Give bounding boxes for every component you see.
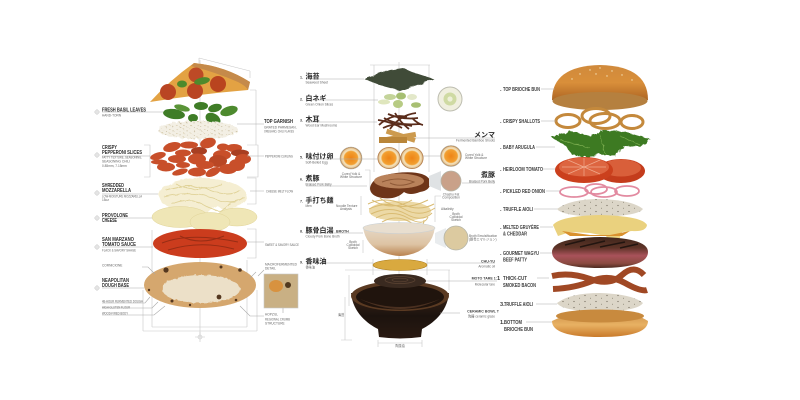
icon: bottom brioche bun bbox=[552, 310, 648, 337]
label: crispy shallots: . bbox=[500, 119, 502, 125]
label: dough specs: WOOD-FIRED BODY bbox=[102, 312, 129, 316]
label: crispy shallots: CRISPY SHALLOTS bbox=[503, 119, 540, 125]
label: 6 chashu: 煮豚 bbox=[306, 174, 320, 182]
label: cheese melt flow: CHEESE MELT FLOW bbox=[266, 190, 293, 194]
label: egg closeup captions: Cured Yolk & bbox=[465, 153, 484, 157]
label: broth collodial: Sketch bbox=[451, 218, 461, 222]
label: moto tare: Molecular tare bbox=[475, 282, 495, 286]
leader lines for burger bbox=[526, 89, 560, 322]
label: moto tare bbox=[472, 276, 497, 286]
label: chashu composition: Chashu Fat bbox=[443, 192, 459, 196]
label: dough specs bbox=[102, 300, 144, 316]
label: top brioche bun: TOP BRIOCHE BUN bbox=[503, 87, 540, 93]
label: macrofermented detail: DETAIL bbox=[265, 266, 276, 270]
icon: smoked bacon bbox=[552, 270, 647, 290]
icon: broth closeup bbox=[435, 226, 468, 250]
label: bottom brioche bun: 1. bbox=[500, 320, 505, 326]
icon: menma bamboo shoots bbox=[379, 129, 416, 143]
icon: basil leaves bbox=[162, 102, 239, 128]
label: thick-cut smoked bacon bbox=[497, 276, 536, 289]
label: 9 aroma oil bbox=[300, 256, 326, 270]
dimension lines for ramen bbox=[341, 62, 450, 347]
label: 8 tonkotsu broth: 8. bbox=[300, 230, 303, 234]
label: chashu right bbox=[469, 170, 495, 184]
label: 2 green onion: 2. bbox=[300, 98, 303, 102]
icon: baby arugula bbox=[551, 130, 650, 157]
icon: noodles bbox=[368, 198, 435, 226]
label: gourmet wagyu beef patty bbox=[500, 251, 539, 264]
label: 8 tonkotsu broth: Cloudy Pork Bone Broth bbox=[306, 234, 340, 238]
label: top garnish: OREGANO, CHILI FLAKES bbox=[264, 130, 294, 134]
label: shredded mozzarella: SHREDDED bbox=[102, 183, 124, 189]
icon: marinated egg halves bbox=[378, 147, 424, 169]
label: truffle aioli: . bbox=[500, 207, 502, 213]
label: 8 tonkotsu broth: 豚骨白湯 bbox=[306, 226, 334, 234]
label: egg closeup captions: Cured Yolk & bbox=[342, 172, 361, 176]
label: bowl foot: 陶藻油 bbox=[395, 343, 405, 348]
label: 4 menma: メンマ bbox=[474, 131, 495, 139]
panel: ramen diagram bbox=[300, 62, 500, 348]
label: provolone cheese: PROVOLONE bbox=[102, 213, 128, 219]
label: truffle aioli lower: TRUFFLE AIOLI bbox=[504, 302, 533, 308]
label: noodle texture analysis: Noodle Texture bbox=[336, 204, 358, 208]
inset: crust crumb detail bbox=[264, 274, 298, 308]
icon: chashu closeup bbox=[429, 171, 461, 191]
label: moto tare: MOTO TARE 1: bbox=[472, 276, 497, 280]
label: provolone cheese bbox=[102, 213, 128, 224]
icon: truffle aioli bottom bbox=[557, 293, 643, 312]
label: san marzano tomato sauce: TOMATO SAUCE bbox=[102, 242, 136, 248]
label: crispy pepperoni slices: PEPPERONI SLICES bbox=[102, 150, 142, 156]
label: broth colloidal left: Collioidal bbox=[347, 243, 360, 247]
label: chashu composition bbox=[442, 192, 460, 200]
leader lines for ramen bbox=[306, 79, 497, 313]
label: 4 menma bbox=[456, 131, 495, 142]
icon: tomato sauce bbox=[153, 229, 247, 258]
icon: provolone discs bbox=[152, 206, 257, 232]
label: crispy pepperoni slices: CRISPY bbox=[102, 145, 117, 151]
label: 4 menma: Fermented Bamboo Shoots bbox=[456, 138, 495, 142]
label: chu-yu bbox=[478, 260, 495, 268]
label: ceramic bowl: 陶器 ceramic glaze bbox=[468, 314, 495, 318]
dimension lines for pizza bbox=[143, 58, 258, 342]
label: melted gruyere and cheddar: . bbox=[500, 225, 502, 231]
icon: ceramic ramen bowl bbox=[351, 274, 449, 338]
label: top garnish: GRATED PARMESAN, bbox=[264, 126, 297, 130]
icon: nori sheet bbox=[364, 68, 434, 91]
label: 9 aroma oil: 9. bbox=[300, 260, 303, 264]
label: 6 chashu bbox=[300, 174, 332, 186]
label: 1 nori: Seaweed Sheet bbox=[306, 80, 328, 84]
label: macrofermented detail: MACROFERMENTED bbox=[265, 262, 298, 266]
label: top brioche bun: . bbox=[500, 87, 502, 93]
icon: top brioche bun bbox=[552, 65, 648, 110]
label: bowl height: 海苔 bbox=[338, 312, 345, 317]
label: broth emulsification bbox=[469, 234, 497, 242]
label: chu-yu: CHU-YU bbox=[481, 260, 495, 264]
label: melted gruyere and cheddar: MELTED GRUYÈRE bbox=[503, 223, 539, 231]
label: melted gruyere and cheddar: & CHEDDAR bbox=[503, 232, 527, 238]
label: broth colloidal left bbox=[347, 240, 360, 250]
icon: wagyu beef patty bbox=[552, 237, 648, 268]
label: noodle texture analysis bbox=[336, 204, 358, 211]
label: 3 wood ear: Wood Ear Mushrooms bbox=[306, 124, 338, 128]
icon: wood ear mushrooms bbox=[378, 113, 423, 129]
label: truffle aioli: TRUFFLE AIOLI bbox=[503, 207, 533, 213]
label: thick-cut smoked bacon: SMOKED BACON bbox=[503, 283, 536, 289]
label: 7 noodles bbox=[300, 196, 334, 208]
label: crispy pepperoni slices bbox=[102, 145, 142, 168]
label: gourmet wagyu beef patty: GOURMET WAGYU bbox=[503, 251, 539, 257]
label: baby arugula: . bbox=[500, 145, 502, 151]
label: 6 chashu: Braised Pork Belly bbox=[306, 182, 332, 186]
label: thick-cut smoked bacon: 1 bbox=[497, 276, 500, 282]
label: 5 egg: 5. bbox=[300, 156, 303, 160]
label: 3 wood ear: 木耳 bbox=[306, 114, 320, 124]
icon: heirloom tomato bbox=[555, 157, 645, 183]
label: melted gruyere and cheddar bbox=[500, 223, 539, 238]
icon: pepperoni slices bbox=[149, 136, 251, 179]
label: top garnish: TOP GARNISH bbox=[264, 119, 293, 125]
label: 5 egg: 味付け卵 bbox=[306, 152, 334, 160]
label: ceramic bowl bbox=[467, 310, 500, 318]
icon: chashu pork belly bbox=[370, 172, 430, 198]
label: broth emulsification: (豚骨エマルジョン) bbox=[469, 236, 497, 242]
label: 8 tonkotsu broth bbox=[300, 226, 349, 238]
label: 1 nori: 1. bbox=[300, 76, 303, 80]
label: crispy pepperoni slices: 0.85mm, 7.15mm bbox=[102, 164, 127, 168]
label: 2 green onion: Green Onion Slices bbox=[306, 102, 334, 106]
label: chashu right: Braised Pork Belly bbox=[469, 180, 495, 184]
icon: melted cheese bbox=[553, 215, 647, 245]
label: top garnish bbox=[264, 119, 297, 134]
label: neapolitan dough base: DOUGH BASE bbox=[102, 283, 129, 289]
label: crispy pepperoni slices: SEASONING CHILI bbox=[102, 160, 130, 164]
label: shredded mozzarella bbox=[102, 183, 143, 202]
label: fresh basil leaves bbox=[102, 108, 146, 118]
label: san marzano tomato sauce: SAN MARZANO bbox=[102, 237, 134, 243]
icon: crispy shallots bbox=[556, 108, 643, 128]
label: 5 egg bbox=[300, 152, 334, 164]
icon: egg closeup left bbox=[340, 147, 362, 169]
label: fresh basil leaves: HAND-TORN bbox=[102, 114, 122, 118]
label: 1 nori bbox=[300, 72, 328, 84]
label: 6 chashu: 6. bbox=[300, 178, 303, 182]
label: 9 aroma oil: 香味油 bbox=[306, 256, 326, 266]
label: neapolitan dough base: NEAPOLITAN bbox=[102, 278, 129, 284]
label: shredded mozzarella: MOZZARELLA bbox=[102, 188, 131, 194]
label: egg closeup captions: White Structure bbox=[465, 156, 487, 160]
label: pepperoni curling: PEPPERONI CURLING bbox=[265, 154, 293, 158]
label: macrofermented detail bbox=[265, 262, 298, 270]
label: ceramic bowl: CERAMIC BOWL T bbox=[467, 310, 500, 314]
label: regional crumb structure: HOPZIU, bbox=[265, 312, 278, 316]
icon: tonkotsu broth bowl bbox=[363, 222, 435, 256]
label: broth collodial bbox=[450, 212, 463, 222]
icon: truffle aioli top bbox=[557, 199, 643, 217]
icon: parmesan garnish bbox=[158, 121, 238, 139]
label: 3 wood ear: 3. bbox=[300, 118, 303, 122]
label: regional crumb structure: STRUCTURE bbox=[265, 322, 285, 326]
label: bottom brioche bun bbox=[500, 320, 533, 333]
label: bottom brioche bun: BOTTOM bbox=[504, 320, 522, 326]
label: egg closeup captions: White Structure bbox=[340, 175, 362, 179]
label: egg closeup captions bbox=[340, 153, 487, 179]
label: sweet and savory sauce: SWEET & SAVORY SAUCE bbox=[265, 243, 299, 247]
panel: burger diagram bbox=[497, 65, 650, 337]
label: dough specs: HIGH-GLUTEN FLOUR bbox=[102, 306, 131, 310]
icon: green onion slices bbox=[378, 92, 421, 108]
label: gourmet wagyu beef patty: BEEF PATTY bbox=[503, 258, 527, 264]
label: neapolitan dough base bbox=[102, 278, 129, 289]
label: broth collodial: Broth bbox=[452, 212, 460, 216]
label: shredded mozzarella: LOW-MOISTURE MOZZARELLA bbox=[102, 194, 143, 198]
label: regional crumb structure: REGIONAL CRUMB bbox=[265, 318, 290, 322]
label: 8 tonkotsu broth: BROTH bbox=[336, 230, 349, 234]
label: regional crumb structure bbox=[265, 312, 290, 326]
label: broth colloidal left: Sketch bbox=[348, 246, 358, 250]
icons: crosshair markers bbox=[94, 109, 100, 291]
label: broth emulsification: Broth Emulsification bbox=[469, 234, 497, 238]
label: chashu right: 煮豚 bbox=[481, 170, 495, 179]
label: 5 egg: Soft-Boiled Egg bbox=[306, 160, 328, 164]
label: shredded mozzarella: 15oz bbox=[102, 198, 109, 202]
icon: dough base bbox=[144, 262, 256, 308]
label: 3 wood ear bbox=[300, 114, 338, 128]
label: thick-cut smoked bacon: THICK-CUT bbox=[503, 276, 527, 282]
label: cornicione: CORNICIONE bbox=[102, 264, 122, 268]
label: 2 green onion: 白ネギ bbox=[306, 94, 326, 102]
label: heirloom tomato: HEIRLOOM TOMATO bbox=[503, 167, 543, 173]
label: pickled red onion: . bbox=[500, 189, 502, 195]
label: 7 noodles: Men bbox=[306, 204, 312, 208]
label: chashu composition: Composition bbox=[442, 196, 460, 200]
leader lines for pizza bbox=[102, 112, 283, 316]
icon: aroma oil disc bbox=[373, 260, 427, 270]
label: 2 green onion bbox=[300, 94, 334, 106]
panel: pizza diagram bbox=[94, 58, 299, 342]
label: baby arugula: BABY ARUGULA bbox=[503, 145, 535, 151]
icon: green onion closeup bbox=[438, 87, 462, 111]
icon: egg closeup right bbox=[440, 146, 462, 166]
label: 7 noodles: 7. bbox=[300, 200, 303, 204]
label: pickled red onion: PICKLED RED ONION bbox=[503, 189, 545, 195]
label: provolone cheese: CHEESE bbox=[102, 218, 117, 224]
label: san marzano tomato sauce bbox=[102, 237, 136, 252]
label: 7 noodles: 手打ち麺 bbox=[306, 196, 334, 204]
label: 1 nori: 海苔 bbox=[306, 72, 320, 80]
label: chu-yu: Aromatic oil bbox=[478, 264, 495, 268]
label: bottom brioche bun: BRIOCHE BUN bbox=[504, 327, 533, 333]
label: heirloom tomato: . bbox=[500, 167, 502, 173]
icon: pickled red onion bbox=[560, 184, 639, 197]
icon: pizza slice bbox=[150, 63, 250, 102]
label: alkalinity: Alkalinity bbox=[441, 207, 454, 211]
label: broth collodial: Collioidal bbox=[450, 215, 463, 219]
label: fresh basil leaves: FRESH BASIL LEAVES bbox=[102, 108, 146, 114]
label: truffle aioli lower: 3. bbox=[500, 302, 505, 308]
label: 9 aroma oil: 香味油 bbox=[306, 264, 315, 270]
label: noodle texture analysis: Analysis bbox=[340, 207, 352, 211]
label: broth colloidal left: Broth bbox=[349, 240, 357, 244]
icon: shredded mozzarella bbox=[158, 178, 247, 214]
label: crispy pepperoni slices: FATTY TEXTURE, SEASONING, bbox=[102, 156, 142, 160]
label: dough specs: 48-HOUR FERMENTED DOUGH bbox=[102, 300, 144, 304]
label: gourmet wagyu beef patty: . bbox=[500, 251, 502, 257]
label: san marzano tomato sauce: FLACK & SAVORY SHAGE bbox=[102, 248, 136, 252]
